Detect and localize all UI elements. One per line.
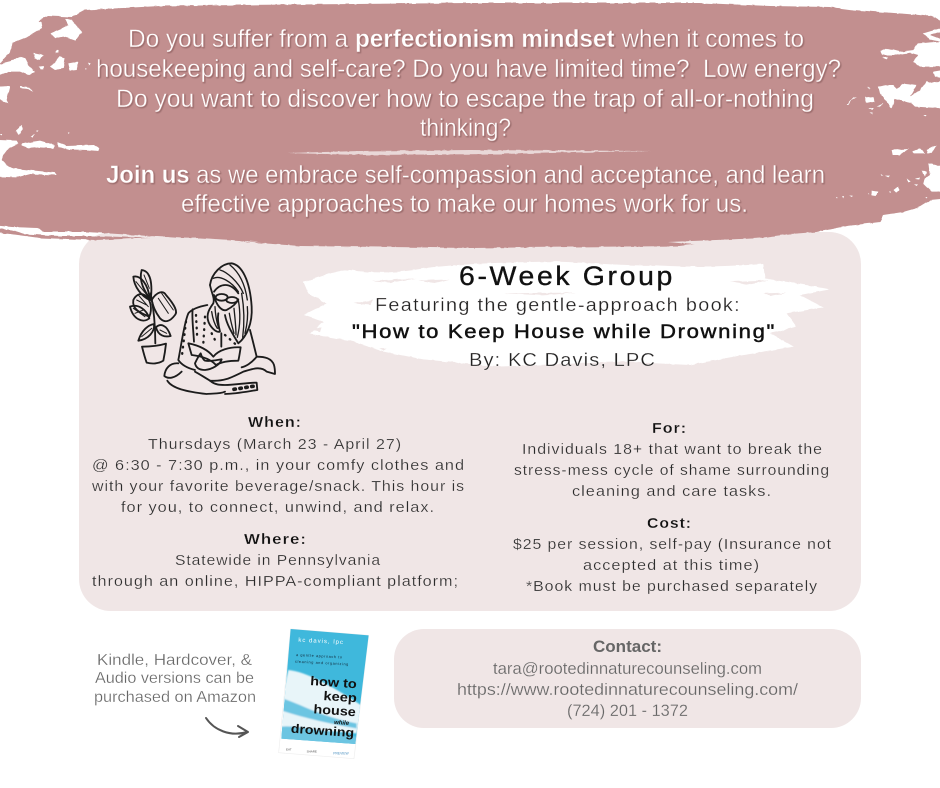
book cover: a gentle approach to [296,653,343,659]
book cover [277,627,373,759]
white brush behind heading [303,262,830,367]
icon: woman reading [164,263,275,394]
illustration: woman reading with plant [130,263,275,394]
book cover: while [334,720,350,727]
intro line 3: Do you want to discover how to escape the trap of all-or-nothing [116,85,814,113]
for and cost details: *Book must be purchased separately [526,578,818,595]
intro line 6: effective approaches to make our homes work for us. [181,190,748,218]
when and where details [91,414,465,590]
intro line 1: Do you suffer from a perfectionism mindset when it comes to [128,25,804,53]
contact email: tara@rootedinnaturecounseling.com [493,660,762,678]
book cover: cleaning and organizing [295,660,349,666]
contact heading: Contact: [593,638,662,656]
right splatter upper [847,28,940,116]
book cover: house [313,702,356,719]
contact phone: (724) 201 - 1372 [567,702,688,720]
label: When: When: [248,414,302,431]
arrow [206,718,248,737]
for text: Individuals 18+ that want to break the [522,441,823,458]
intro line 2: housekeeping and self-care? Do you have limited time? Low energy? [96,55,841,83]
book cover: how to [310,674,358,691]
heading: 6-Week Group: 6-Week Group [459,261,675,291]
book cover: EAT [286,748,292,752]
book cover: kc davis, lpc [298,638,344,646]
purchase note: purchased on Amazon [94,689,256,706]
contact url: https://www.rootedinnaturecounseling.com/ [457,681,798,699]
icon: potted plant [130,270,176,363]
where text: Statewide in Pennsylvania [175,552,381,569]
left splatter upper [0,18,91,103]
label: For: For: [652,420,687,437]
intro line 4: thinking? [420,114,511,142]
purchase note: Kindle, Hardcover, & [97,652,252,669]
label: Cost: Cost: [647,515,692,532]
left splatter lower [0,125,99,177]
label: Where: Where: [244,531,307,548]
book title: "How to Keep House while Drowning" [352,322,776,343]
when and where details: with your favorite beverage/snack. This hour is [91,478,465,495]
when text: Thursdays (March 23 - April 27) [148,436,402,453]
purchase note [94,652,256,706]
panel: contact [394,629,861,728]
cost text: $25 per session, self-pay (Insurance not [513,536,832,553]
intro text [96,25,841,218]
heading block [352,261,776,370]
for and cost details: accepted at this time) [583,557,760,574]
banner: pink brush stroke [0,3,940,248]
when and where details: for you, to connect, unwind, and relax. [121,499,435,516]
book cover: keep [323,689,358,705]
for and cost details [513,420,832,595]
panel: details background [79,232,861,611]
bottom-left brush strip [0,228,150,240]
book cover: PREVIEW [333,752,350,756]
for and cost details: stress-mess cycle of shame surrounding [514,462,830,479]
when and where details: through an online, HIPPA-compliant platform; [92,573,459,590]
purchase note: Audio versions can be [95,670,254,687]
when and where details: @ 6:30 - 7:30 p.m., in your comfy clothes and [92,457,465,474]
author: By: KC Davis, LPC [469,349,656,370]
for and cost details: cleaning and care tasks. [572,483,772,500]
right splatter lower [836,145,940,199]
subheading: Featuring the gentle-approach book: [375,295,741,315]
book cover: drowning [290,722,355,740]
book cover: SHARE [307,749,317,753]
intro line 5: Join us as we embrace self-compassion and acceptance, and learn [106,161,825,189]
panel-coloured strips under brush [668,236,815,245]
